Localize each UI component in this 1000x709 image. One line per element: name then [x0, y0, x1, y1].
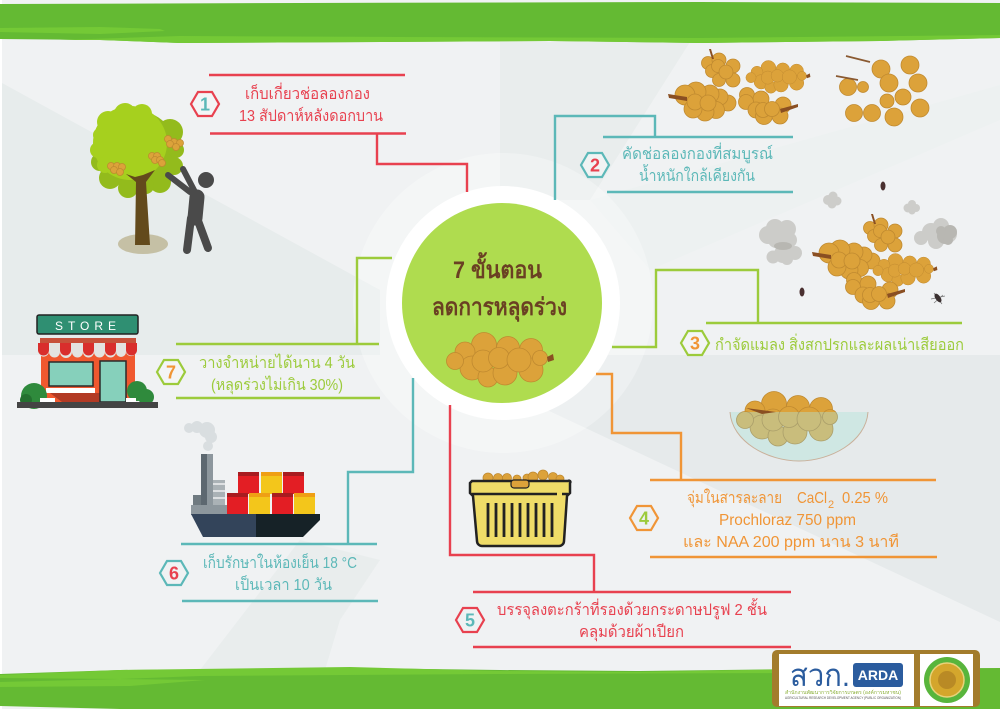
logo caption english: AGRICULTURAL RESEARCH DEVELOPMENT AGENCY (PUBLIC ORGANIZATION) [785, 696, 902, 700]
seal [924, 657, 970, 703]
step 5 connector [450, 405, 594, 592]
step 6 badge: 6 [169, 564, 179, 584]
step 4 panel [630, 480, 937, 557]
icon: bowl of solution [730, 392, 868, 461]
step 4 text: 2 [828, 499, 834, 511]
step 4 badge [630, 506, 658, 530]
step 2 text: น้ำหนักใกล้เคียงกัน [639, 164, 755, 185]
step 2 badge [581, 153, 609, 177]
step 2 text: คัดช่อลองกองที่สมบูรณ์ [622, 142, 773, 164]
step 4 text: Prochloraz 750 ppm [719, 512, 856, 529]
step 1 text: 13 สัปดาห์หลังดอกบาน [239, 106, 383, 125]
step 7 text: วางจำหน่ายได้นาน 4 วัน [199, 353, 355, 372]
step 4 text: จุ่มในสารละลาย [687, 488, 782, 508]
icon: fruit bunches on top [668, 49, 810, 124]
icon: tree and harvester [90, 103, 214, 254]
step 1 text: เก็บเกี่ยวช่อลองกอง [245, 82, 370, 103]
step 4 text: 0.25 % [842, 490, 888, 507]
step 3 panel [681, 323, 964, 355]
step 3 badge: 3 [690, 334, 700, 354]
icon: longan bunch [446, 332, 554, 387]
store sign text: STORE [55, 319, 121, 333]
step 2 badge: 2 [590, 156, 600, 176]
step 1 badge: 1 [200, 94, 210, 114]
logo panel [772, 650, 980, 707]
central white ring [386, 186, 620, 420]
step 6 panel [160, 544, 378, 601]
step 2 connector [555, 116, 655, 200]
central subtitle: ลดการหลุดร่วง [432, 294, 567, 323]
step 2 panel [581, 137, 793, 192]
top green band [0, 2, 1000, 43]
central circle [402, 203, 602, 403]
step 6 badge [160, 561, 188, 585]
step 1 panel [191, 75, 406, 134]
step 5 badge: 5 [465, 610, 475, 630]
step 2 text [622, 142, 773, 185]
ARDA badge [853, 663, 903, 687]
step 5 text: คลุมด้วยผ้าเปียก [579, 623, 684, 642]
step 3 connector [612, 270, 758, 347]
ARDA badge: ARDA [858, 667, 898, 683]
step 1 text [239, 82, 383, 125]
step 1 badge [191, 92, 219, 116]
step 6 text [203, 552, 357, 594]
icon: loose fruits [836, 56, 929, 126]
step 4 badge: 4 [639, 508, 649, 528]
central title: 7 ขั้นตอน [453, 251, 543, 284]
step 7 connector [357, 258, 392, 344]
step 6 text: เป็นเวลา 10 วัน [235, 574, 332, 594]
step 3 text: กำจัดแมลง สิ่งสกปรกและผลเน่าเสียออก [715, 333, 964, 354]
step 7 badge [157, 360, 185, 384]
logo caption: สำนักงานพัฒนาการวิจัยการเกษตร (องค์การมหาชน) [785, 689, 901, 696]
step 5 text: บรรจุลงตะกร้าที่รองด้วยกระดาษปรูฟ 2 ชั้น [497, 598, 767, 620]
step 7 text [199, 353, 355, 395]
step 4 connector [596, 374, 681, 480]
icon: cargo ship [184, 421, 320, 537]
step 4 text [683, 488, 899, 551]
step 5 text [497, 598, 767, 642]
step 7 text: (หลุดร่วงไม่เกิน 30%) [211, 375, 343, 395]
icon: store [17, 315, 158, 409]
step 5 panel [456, 592, 791, 647]
step 4 text: และ NAA 200 ppm นาน 3 นาที [683, 533, 899, 551]
step 6 text: เก็บรักษาในห้องเย็น 18 °C [203, 552, 357, 572]
step 5 badge [456, 608, 484, 632]
bottom green band [0, 667, 1000, 709]
step 6 connector [348, 378, 413, 544]
icon: fruit bunches with dirt and insects [759, 182, 957, 310]
step 7 panel [157, 344, 380, 398]
step 7 badge: 7 [166, 362, 176, 382]
ARDA logo wordmark: สวก. [790, 658, 850, 693]
icon: basket [470, 470, 570, 546]
step 4 text: CaCl [797, 490, 827, 507]
step 3 badge [681, 331, 709, 355]
step 1 connector [377, 134, 467, 192]
